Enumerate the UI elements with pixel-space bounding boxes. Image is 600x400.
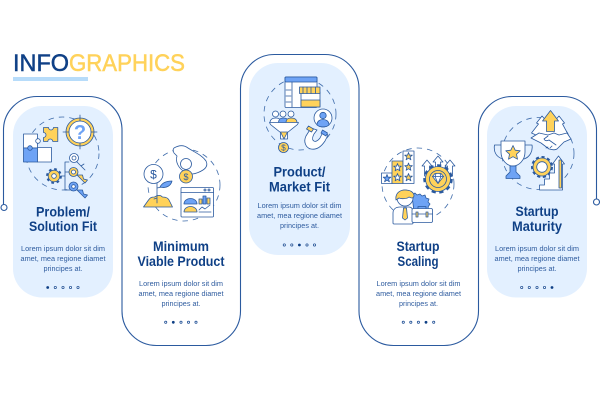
- text block: [138, 279, 224, 308]
- connecting timeline outline: [1, 54, 600, 346]
- icon: puzzle, target and keys: [24, 115, 99, 198]
- pagination dots: [46, 286, 79, 289]
- title: [13, 50, 185, 81]
- pagination dots: [402, 321, 435, 324]
- text block: principes at.: [280, 221, 319, 230]
- icon: plant, coin and dashboard: [144, 146, 220, 221]
- icon: plant, coin and dashboard: $: [183, 172, 189, 182]
- text block: Lorem ipsum dolor sit dim: [495, 244, 579, 253]
- icon: puzzle, target and keys: ?: [74, 122, 86, 144]
- heading: problem solution fit: [29, 204, 97, 234]
- heading: problem solution fit: Problem/: [36, 204, 90, 220]
- text block: amet, mea regione diamet: [20, 254, 106, 263]
- text block: amet, mea regione diamet: [376, 289, 462, 298]
- panel: minimum viable product: [138, 146, 225, 324]
- icon: ratings, gem gear and team: [382, 148, 455, 224]
- text block: amet, mea regione diamet: [257, 211, 343, 220]
- heading: startup scaling: Startup: [396, 238, 440, 254]
- heading: minimum viable product: [138, 238, 225, 269]
- heading: startup scaling: [396, 238, 440, 269]
- panel: problem solution fit: [13, 106, 113, 298]
- icon: store, funnel and magnet: $: [281, 144, 286, 152]
- text block: Lorem ipsum dolor sit dim: [376, 279, 460, 288]
- heading: problem solution fit: Solution Fit: [29, 218, 97, 234]
- title: INFO: [13, 50, 69, 77]
- text block: [376, 279, 462, 308]
- heading: product market fit: [269, 164, 330, 194]
- heading: minimum viable product: Viable Product: [138, 253, 225, 269]
- text block: Lorem ipsum dolor sit dim: [258, 201, 342, 210]
- text block: [494, 244, 580, 273]
- text block: principes at.: [518, 264, 556, 273]
- pagination dots: [283, 244, 316, 246]
- pagination dots: [165, 321, 197, 324]
- icon: plant, coin and dashboard: $: [150, 168, 157, 182]
- heading: startup scaling: Scaling: [398, 253, 438, 269]
- text block: amet, mea regione diamet: [138, 289, 224, 298]
- text block: Lorem ipsum dolor sit dim: [139, 279, 223, 288]
- title: GRAPHICS: [69, 50, 185, 77]
- heading: startup maturity: Startup: [516, 203, 558, 219]
- heading: startup maturity: [512, 203, 562, 234]
- heading: product market fit: Product/: [274, 164, 326, 180]
- panel: product market fit: [249, 63, 350, 255]
- text block: [20, 244, 106, 273]
- panel: startup scaling: [376, 148, 462, 324]
- heading: product market fit: Market Fit: [269, 178, 330, 194]
- heading: minimum viable product: Minimum: [153, 238, 209, 254]
- icon: trophy, handshake and stairs: [494, 110, 574, 190]
- icon: store, funnel and magnet: [264, 77, 336, 152]
- panel: startup maturity: [487, 106, 587, 298]
- text block: principes at.: [399, 299, 438, 308]
- text block: amet, mea regione diamet: [494, 254, 580, 263]
- pagination dots: [521, 286, 553, 289]
- text block: principes at.: [44, 264, 82, 273]
- heading: startup maturity: Maturity: [512, 218, 562, 234]
- text block: Lorem ipsum dolor sit dim: [21, 244, 105, 253]
- text block: [257, 201, 343, 230]
- text block: principes at.: [162, 299, 200, 308]
